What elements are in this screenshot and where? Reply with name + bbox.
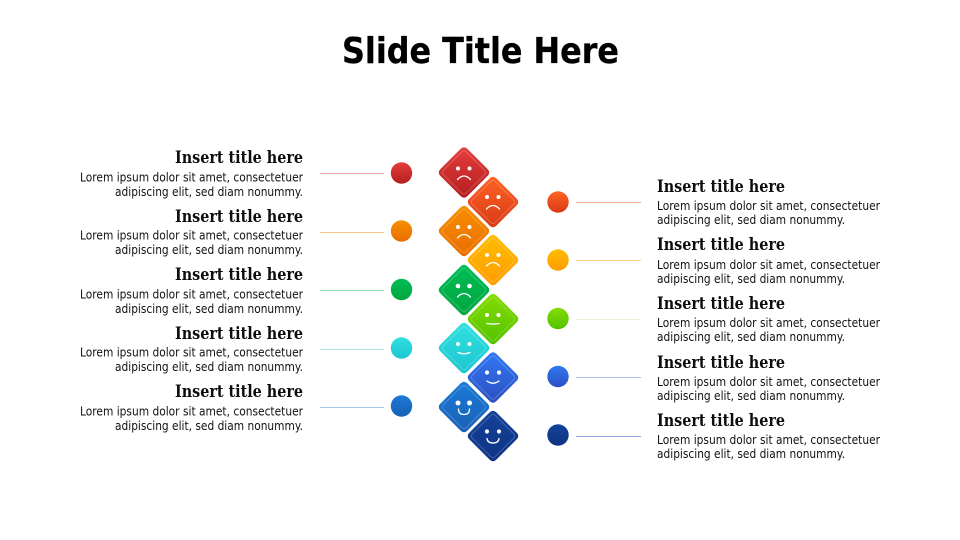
right item 1 text: adipiscing elit, sed diam nonummy. [657, 213, 845, 227]
right item 3 text [657, 294, 880, 344]
icon: cyan smile diamond [439, 323, 489, 373]
left item 1 text [80, 148, 303, 199]
title: Slide Title Here [342, 31, 619, 72]
right item 2 text: adipiscing elit, sed diam nonummy. [657, 272, 845, 286]
icon: blue smile diamond [468, 352, 518, 403]
icon: red sad diamond [439, 147, 489, 198]
left item 5 text: adipiscing elit, sed diam nonummy. [115, 419, 303, 433]
connector lines right [576, 202, 641, 436]
left item 5 text [80, 382, 303, 433]
left item 2 text: adipiscing elit, sed diam nonummy. [115, 243, 303, 257]
icon: amber sad diamond [468, 235, 518, 285]
left item 3 text [80, 265, 303, 316]
right item 4 text [657, 353, 880, 403]
left item 4 text: adipiscing elit, sed diam nonummy. [115, 360, 303, 374]
right item 1 text: Insert title here [657, 177, 785, 197]
right item 5 text: Lorem ipsum dolor sit amet, consectetuer [657, 433, 880, 447]
right item 5 text: Insert title here [657, 411, 785, 431]
right item 2 text: Insert title here [657, 235, 785, 255]
right item 4 text: Lorem ipsum dolor sit amet, consectetuer [657, 375, 880, 389]
right item 5 text: adipiscing elit, sed diam nonummy. [657, 447, 845, 461]
left item 1 text: Insert title here [175, 148, 303, 168]
icon: lime neutral diamond [468, 294, 518, 344]
left item 5 text: Insert title here [175, 382, 303, 402]
left item 2 text: Insert title here [175, 207, 303, 227]
right item 3 text: Insert title here [657, 294, 785, 314]
left item 5 text: Lorem ipsum dolor sit amet, consectetuer [80, 404, 303, 418]
right item 5 text [657, 411, 880, 461]
right item 2 text: Lorem ipsum dolor sit amet, consectetuer [657, 258, 880, 272]
left item 1 text: Lorem ipsum dolor sit amet, consectetuer [80, 170, 303, 184]
left item 3 text: adipiscing elit, sed diam nonummy. [115, 302, 303, 316]
icon: navy big smile diamond [468, 411, 518, 461]
right item 4 text: Insert title here [657, 353, 785, 373]
connector lines left [320, 174, 384, 408]
right item 1 text: Lorem ipsum dolor sit amet, consectetuer [657, 199, 880, 213]
left item 1 text: adipiscing elit, sed diam nonummy. [115, 185, 303, 199]
right item 3 text: Lorem ipsum dolor sit amet, consectetuer [657, 316, 880, 330]
right item 4 text: adipiscing elit, sed diam nonummy. [657, 389, 845, 403]
right item 2 text [657, 235, 880, 286]
left item 4 text [80, 324, 303, 374]
left item 4 text: Lorem ipsum dolor sit amet, consectetuer [80, 346, 303, 360]
dots right [547, 191, 569, 446]
icon: orange sad diamond [439, 206, 489, 256]
left item 3 text: Insert title here [175, 265, 303, 285]
left item 3 text: Lorem ipsum dolor sit amet, consectetuer [80, 288, 303, 302]
left item 2 text: Lorem ipsum dolor sit amet, consectetuer [80, 228, 303, 242]
icon: green sad diamond [439, 265, 489, 315]
right item 1 text [657, 177, 880, 227]
icon: mid-blue big smile diamond [439, 382, 489, 432]
icon: orange-red sad diamond [468, 177, 518, 227]
left item 2 text [80, 207, 303, 257]
right item 3 text: adipiscing elit, sed diam nonummy. [657, 330, 845, 344]
dots left [391, 162, 412, 417]
left item 4 text: Insert title here [175, 324, 303, 344]
